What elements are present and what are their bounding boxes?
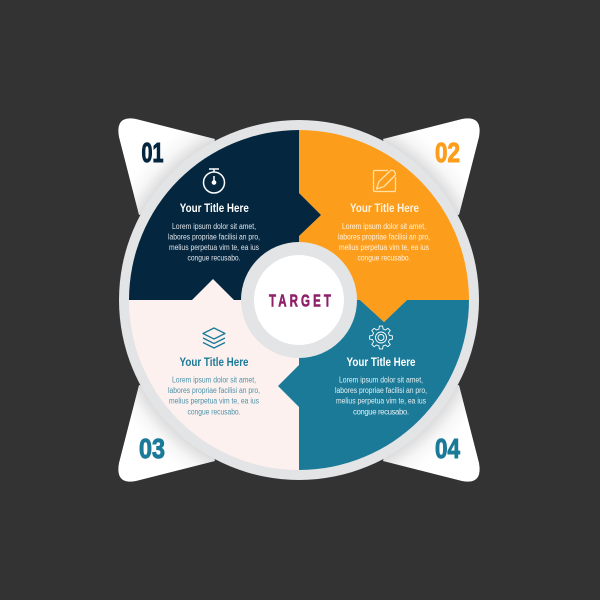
text block: 01: Your Title Here (180, 203, 249, 215)
outer ring (119, 120, 479, 480)
text block: 03 (168, 357, 260, 416)
text block: 04: labores propriae facilisi an pro, (335, 386, 427, 395)
text block: 01: labores propriae facilisi an pro, (168, 232, 260, 242)
text block: 01: melius perpetua vim te, ea ius (169, 243, 259, 252)
text block: 03: Lorem ipsum dolor sit amet, (172, 376, 256, 384)
icon: gear (370, 326, 392, 349)
text block: 02: Lorem ipsum dolor sit amet, (342, 222, 426, 231)
text block: 02 (338, 203, 430, 262)
text block: 02: melius perpetua vim te, ea ius (339, 243, 429, 252)
text block: 03: labores propriae facilisi an pro, (168, 386, 260, 395)
segment: navy (120, 120, 321, 300)
hub label: TARGET (269, 291, 334, 311)
segment: pink (120, 279, 299, 480)
icon: stopwatch (204, 169, 224, 193)
corner tab: bottom right (383, 385, 480, 482)
text block: 04: melius perpetua vim te, ea ius (336, 396, 426, 406)
text block: 04: Lorem ipsum dolor sit amet, (339, 376, 423, 384)
hub (241, 242, 357, 358)
text block: 02: congue recusabo. (358, 254, 410, 262)
icon: layers (203, 328, 225, 348)
text block: 02: Your Title Here (350, 203, 419, 215)
corner tab: top left (118, 118, 215, 215)
segment: teal (278, 300, 469, 470)
number 01: 01 (142, 137, 164, 168)
text block: 01: congue recusabo. (188, 254, 240, 262)
text block: 04 (335, 357, 427, 416)
corner tab: top right (383, 118, 480, 215)
text block: 04: congue recusabo. (353, 408, 409, 416)
number 02: 02 (435, 137, 460, 168)
text block: 03: congue recusabo. (188, 408, 240, 416)
corner tab: bottom left (118, 385, 215, 482)
number 04: 04 (435, 433, 460, 464)
segment: orange (299, 130, 469, 322)
text block: 02: labores propriae facilisi an pro, (338, 232, 430, 242)
number 03: 03 (139, 433, 165, 464)
text block: 03: melius perpetua vim te, ea ius (169, 396, 259, 406)
text block: 01: Lorem ipsum dolor sit amet, (172, 222, 256, 231)
infographic (118, 118, 480, 482)
text block: 04: Your Title Here (346, 357, 416, 369)
pie segments (129, 130, 469, 470)
icon: pencil note (374, 170, 396, 192)
text block: 03: Your Title Here (180, 357, 248, 369)
text block: 01 (168, 203, 260, 262)
